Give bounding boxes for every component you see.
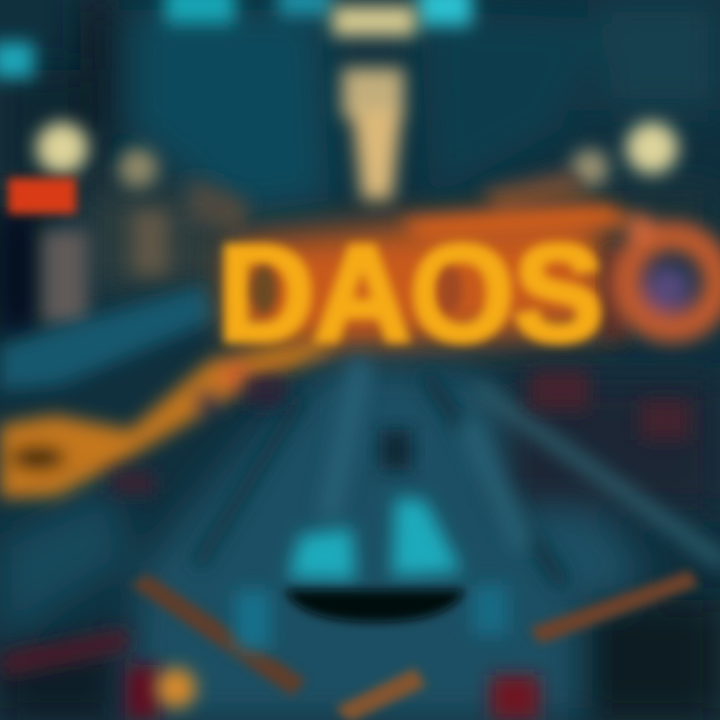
letter counters (251, 266, 463, 314)
orange backing patches (230, 212, 615, 350)
black smile (285, 590, 465, 622)
upper background tones (0, 0, 720, 335)
orange ring icon (626, 214, 718, 328)
red sign (8, 178, 76, 214)
dark gap right of text (604, 250, 626, 340)
mid teal floor (0, 365, 720, 720)
top cyan lights (0, 0, 472, 78)
crimson accents (0, 370, 690, 720)
brown stripes (130, 570, 698, 720)
cyan shapes (235, 498, 508, 650)
orange top edge (400, 205, 640, 240)
floor diagonal streaks (200, 370, 720, 580)
chain left (0, 338, 330, 498)
orange dot (156, 668, 196, 708)
floor dark figure (380, 430, 412, 470)
DAOS title: DAOS (218, 217, 603, 369)
hanging lamps (36, 122, 678, 188)
central lamp column (332, 6, 416, 200)
left grey column (42, 170, 590, 325)
teal walkway left (0, 285, 215, 390)
